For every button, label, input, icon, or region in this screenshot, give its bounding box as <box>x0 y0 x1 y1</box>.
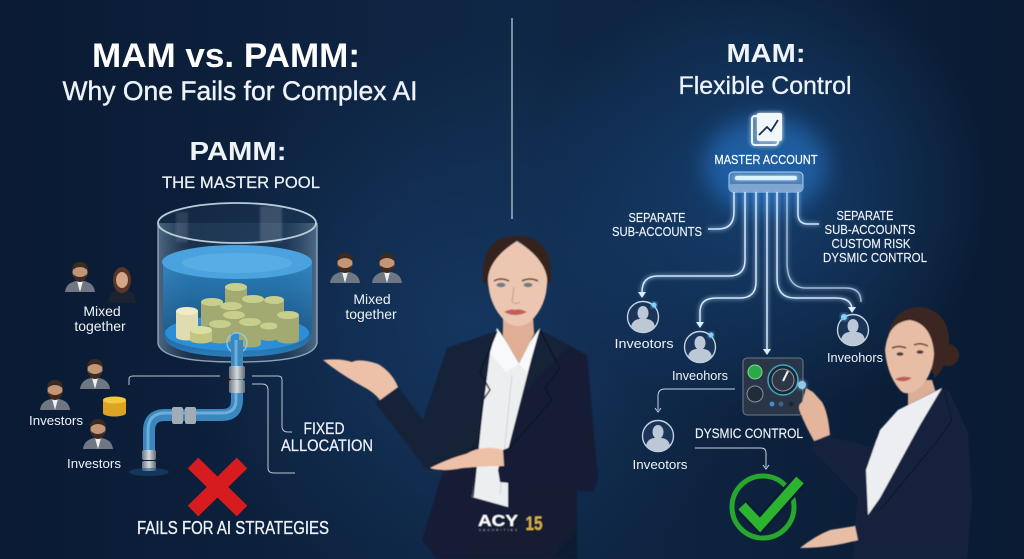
label: fixed allocation <box>281 419 373 455</box>
presenter: left woman <box>323 236 598 559</box>
investors: lower left group <box>29 359 126 471</box>
heading: PAMM: PAMM: <box>190 136 286 166</box>
lower hand <box>800 526 858 548</box>
shirt <box>472 328 540 507</box>
neck <box>503 315 534 364</box>
heading: MAM: Flexible Control <box>678 72 852 100</box>
investor node 1: Inveotors <box>614 336 674 351</box>
investors: mixed together left <box>65 262 136 334</box>
investor node 3 <box>827 314 883 365</box>
control panel <box>743 358 803 415</box>
label: separate sub-accounts right: SUB-ACCOUNTS <box>824 223 916 237</box>
investor node 4 <box>632 420 688 472</box>
icon: gold coins <box>103 396 126 416</box>
label: separate sub-accounts right: DYSMIC CONTROL <box>823 251 927 265</box>
face <box>885 320 934 393</box>
lapels <box>473 330 560 497</box>
glow behind master hub <box>704 117 828 213</box>
logo: ACY 15 <box>478 513 543 535</box>
lower hand <box>430 448 504 470</box>
label: master account: MASTER ACCOUNT <box>714 153 818 167</box>
label: separate sub-accounts left: SUB-ACCOUNTS <box>612 225 702 239</box>
label: separate sub-accounts right: SEPARATE <box>836 209 894 223</box>
investor node 4: Inveotors <box>632 457 688 472</box>
hair <box>483 236 551 285</box>
logo: ACY 15: SECURITIES <box>479 528 517 532</box>
presenter: right woman <box>799 307 972 559</box>
logo: ACY 15: 15 <box>526 514 543 535</box>
icon: master account hub <box>729 172 803 192</box>
investors: mixed together right <box>330 253 402 322</box>
investors: lower left group: Investors <box>29 413 84 428</box>
face <box>488 241 547 326</box>
investors: mixed together left: Mixed <box>83 303 121 319</box>
icon: pipe <box>129 333 247 476</box>
label: separate sub-accounts right: CUSTOM RISK <box>832 237 911 251</box>
investors: lower left group: Investors <box>67 456 122 471</box>
label: fixed allocation: ALLOCATION <box>281 436 373 455</box>
logo: ACY 15: ACY <box>478 513 518 530</box>
arrowheads <box>638 292 856 355</box>
label: separate sub-accounts left: SEPARATE <box>628 211 686 225</box>
investor node 3: Inveohors <box>827 350 883 365</box>
label: dysmic control: DYSMIC CONTROL <box>695 426 803 441</box>
icon: woman investor <box>108 267 136 303</box>
connector arrows: master to investors <box>642 192 861 352</box>
upper hand <box>323 359 398 400</box>
icon: red X <box>193 463 242 511</box>
heading: PAMM: THE MASTER POOL <box>162 173 320 192</box>
bun and hair <box>937 344 959 366</box>
water <box>162 245 312 357</box>
forearm <box>498 420 598 492</box>
label: separate sub-accounts right <box>823 209 927 265</box>
label: fails for AI strategies: FAILS FOR AI STRATEGIES <box>137 518 329 538</box>
pointing hand <box>799 388 830 441</box>
callout lines: fixed allocation <box>129 376 295 473</box>
label: fixed allocation: FIXED <box>304 419 344 438</box>
coin stacks <box>176 283 299 348</box>
arrow: panel to investor <box>655 389 735 412</box>
right lapel <box>880 387 952 510</box>
investors: mixed together right: together <box>345 306 397 322</box>
heading: PAMM <box>162 136 320 192</box>
heading: MAM <box>678 38 852 100</box>
icon: master pool tank <box>158 203 317 362</box>
investors: mixed together right: Mixed <box>353 291 391 307</box>
glow: fingertip spark <box>798 381 806 389</box>
icon: green check <box>732 476 800 538</box>
neck <box>908 380 936 420</box>
arrow: control to check <box>695 448 769 469</box>
icon: master account chart <box>752 113 782 145</box>
title <box>62 37 418 106</box>
investor node 1 <box>614 302 674 351</box>
shirt <box>866 388 942 515</box>
label: separate sub-accounts left <box>612 211 702 239</box>
investor node 2 <box>672 332 728 383</box>
investors: mixed together left: together <box>74 318 126 334</box>
title: Why One Fails for Complex AI <box>62 76 418 106</box>
title: MAM vs. PAMM: <box>92 37 360 75</box>
investor node 2: Inveohors <box>672 368 728 383</box>
heading: MAM: MAM: <box>726 38 806 68</box>
blazer <box>810 387 972 559</box>
blazer <box>375 330 598 559</box>
